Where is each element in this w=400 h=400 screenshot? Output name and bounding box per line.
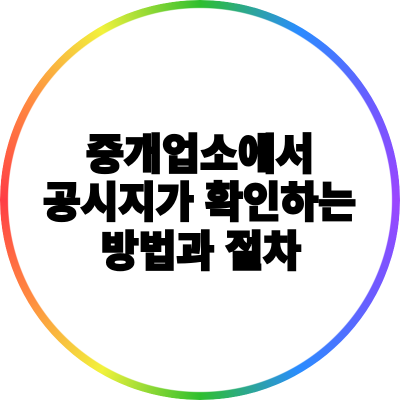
title: 공시지가 확인하는 (43, 179, 356, 226)
title: 방법과 절차 (101, 228, 301, 275)
title: 중개업소에서 (86, 131, 314, 178)
